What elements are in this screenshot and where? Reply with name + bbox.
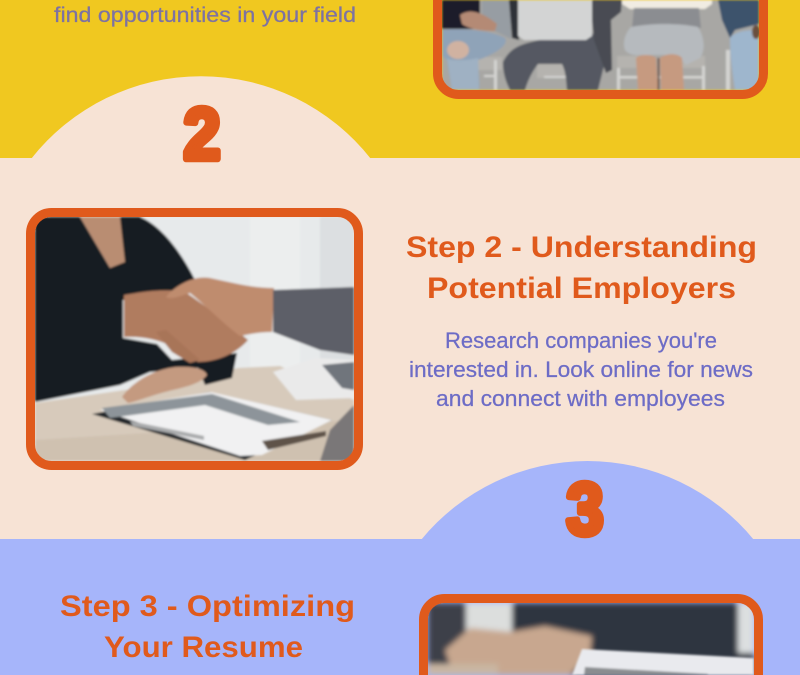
step 3 heading: Step 3 - Optimizing — [60, 590, 355, 623]
step 2 tab: peach dome — [31, 76, 371, 159]
step 2 heading — [406, 231, 757, 305]
step 1 body text: find opportunities in your field — [54, 4, 356, 27]
step 2 body text: interested in. Look online for news — [409, 357, 753, 382]
photo: hands holding a resume — [424, 598, 758, 675]
step 2 body text: and connect with employees — [436, 386, 725, 411]
step 3 heading: Your Resume — [104, 631, 303, 664]
panel: step 1 yellow section — [0, 0, 800, 158]
photo: seated job candidates — [438, 0, 764, 94]
panel: step 2 peach section — [0, 158, 800, 539]
step 3 heading — [60, 590, 355, 664]
step 2 heading: Potential Employers — [427, 272, 736, 305]
step 2 heading: Step 2 - Understanding — [406, 231, 757, 264]
number 2: 2 — [184, 93, 220, 175]
panel: step 3 blue section — [0, 539, 800, 675]
number 3: 3 — [566, 468, 604, 550]
photo: handshake over a document — [30, 212, 358, 466]
step 3 tab: blue dome — [421, 461, 754, 540]
step 2 body text: Research companies you're — [445, 328, 717, 353]
step 2 body text — [409, 328, 753, 411]
